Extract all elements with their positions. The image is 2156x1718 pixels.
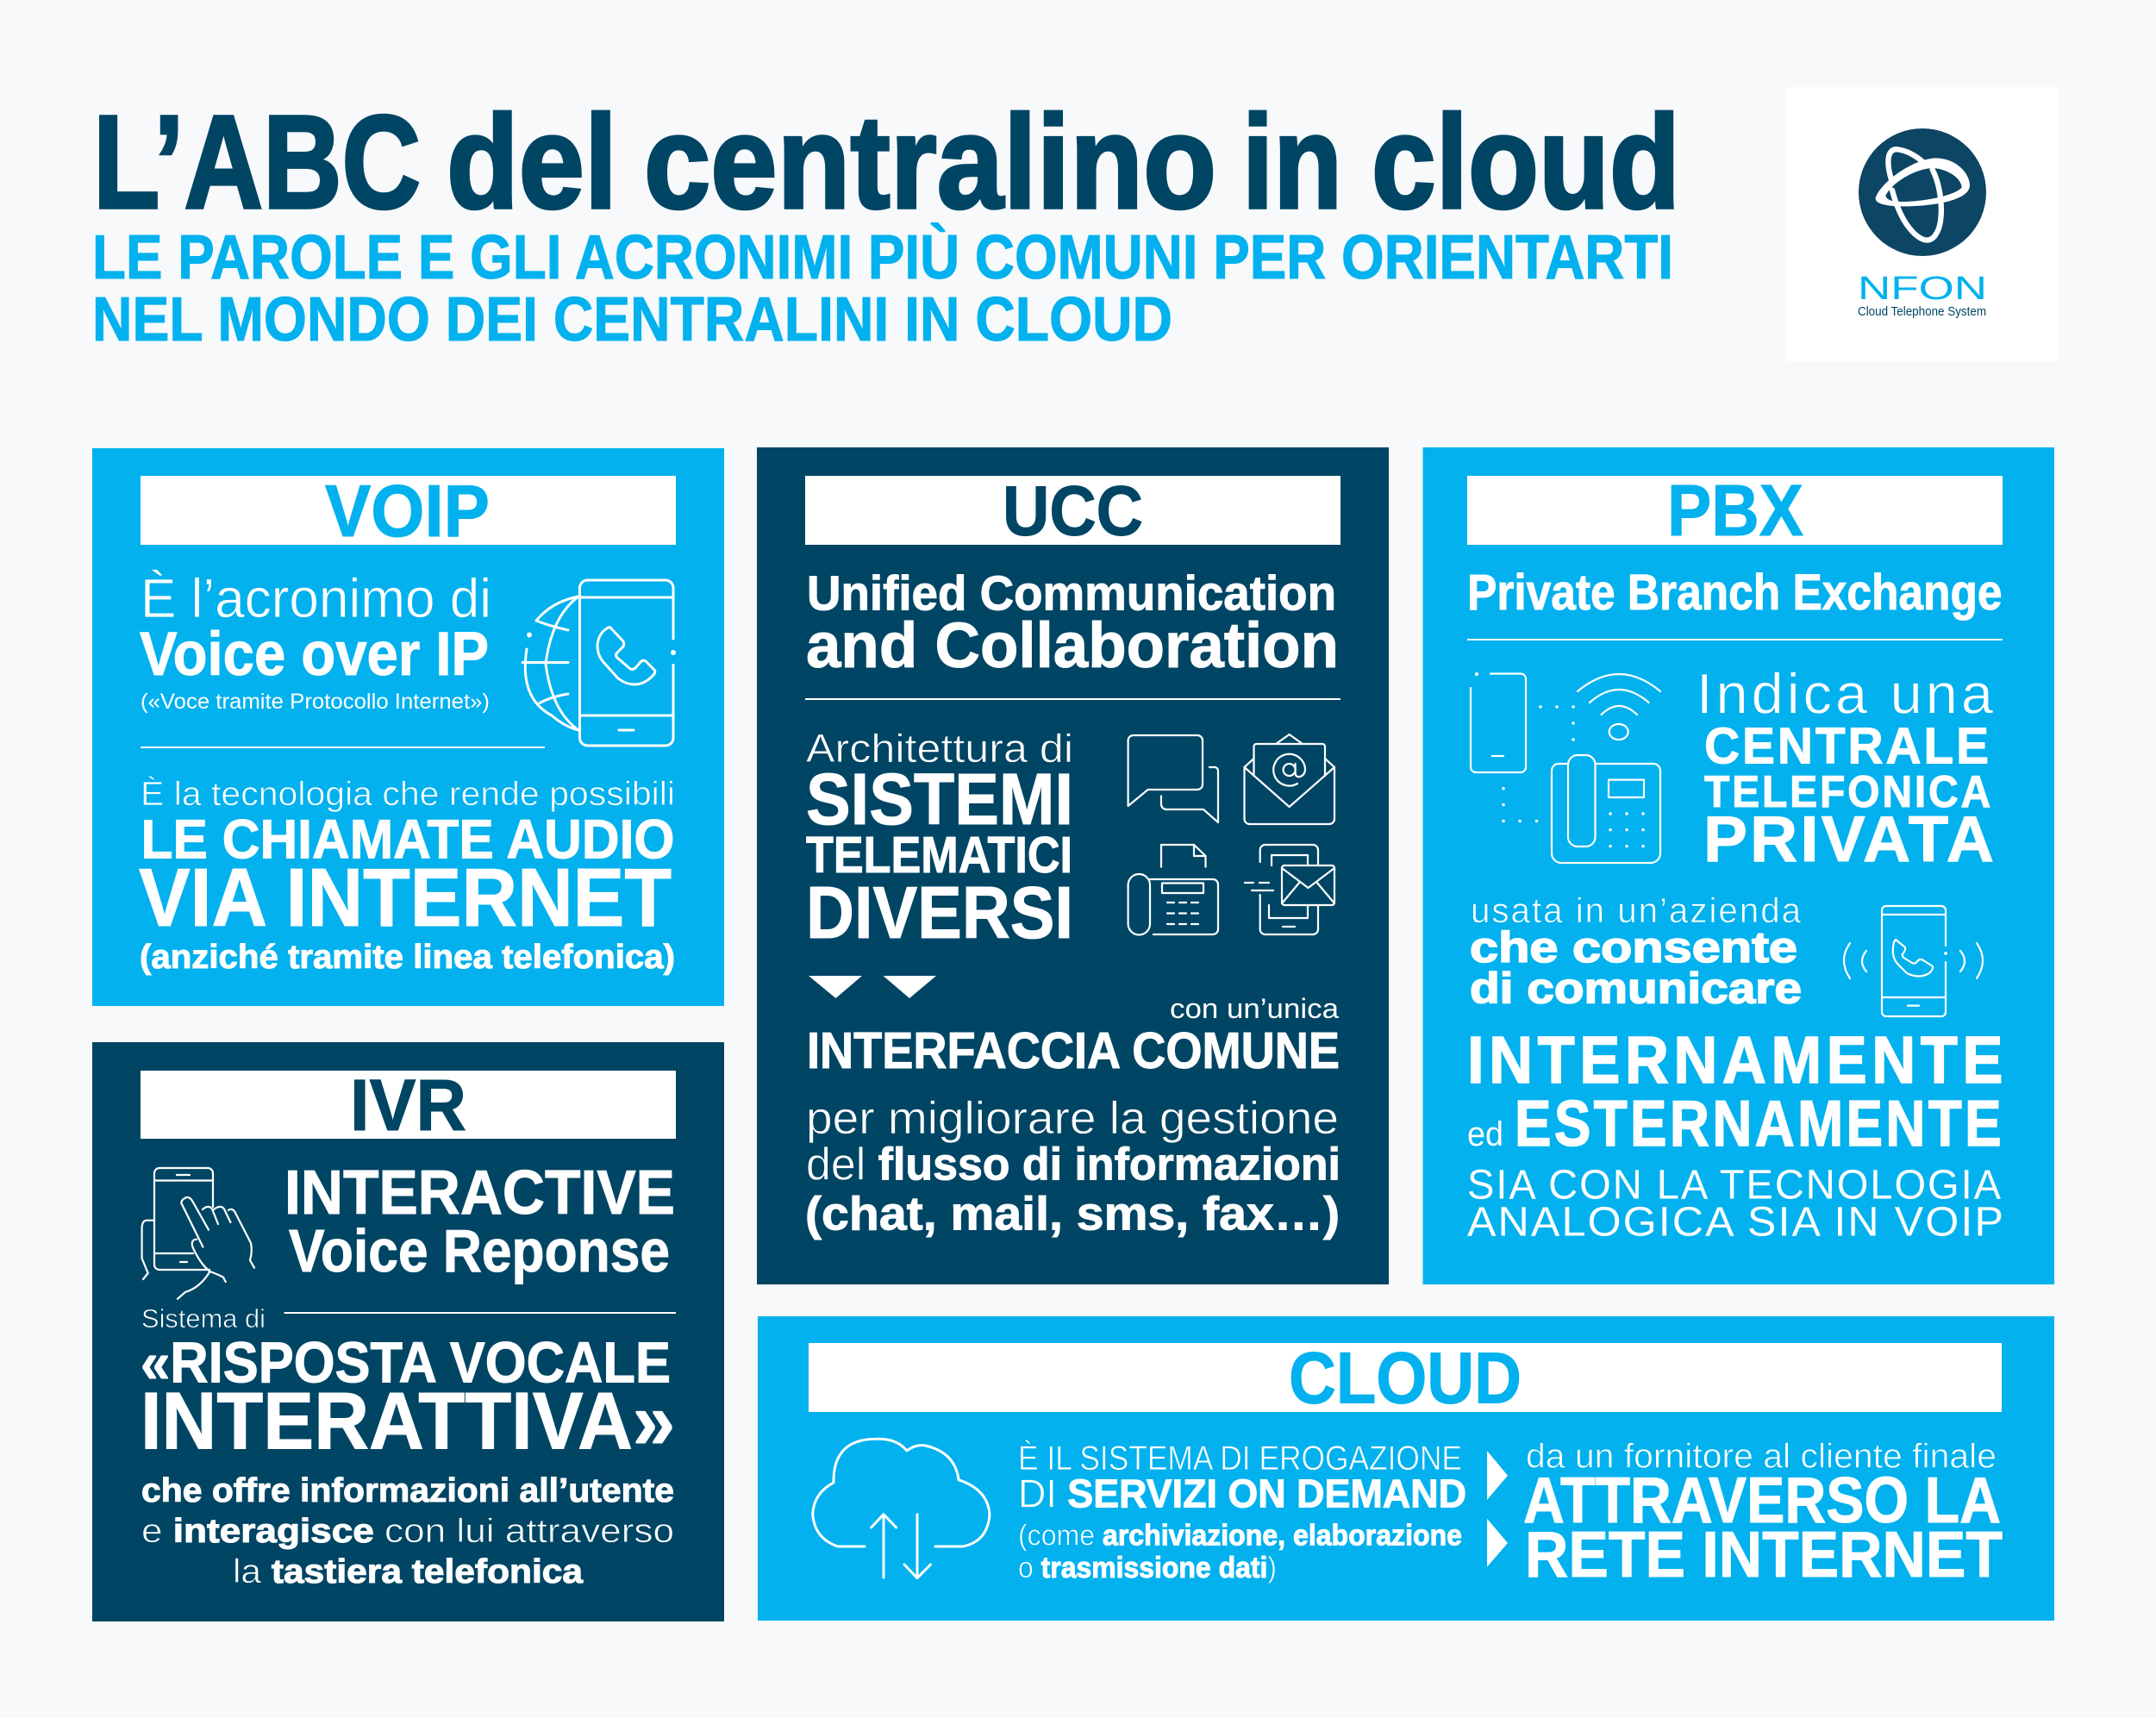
logo: NFON	[1785, 87, 2059, 361]
heading: PBX: PBX	[1667, 470, 1803, 551]
text: attraverso la rete internet	[1523, 1438, 2003, 1590]
text: flusso di informazioni: del flusso di informazioni	[806, 1140, 1340, 1190]
title: L’ABC	[93, 88, 421, 236]
title	[93, 88, 1680, 236]
subtitle	[92, 222, 1673, 354]
icon: hand touching smartphone	[142, 1168, 254, 1299]
text: acronym definition: («Voce tramite Protocollo Internet»)	[141, 690, 490, 714]
text: risposta vocale interattiva: «RISPOSTA VOCALE	[141, 1331, 671, 1395]
text: sistema di erogazione: DI SERVIZI ON DEMAND	[1018, 1471, 1466, 1515]
logo: NFON: Cloud Telephone System	[1858, 304, 1986, 319]
icon: cloud upload download	[813, 1439, 990, 1578]
text: technology description: VIA INTERNET	[139, 852, 672, 944]
text: sistema di erogazione	[1018, 1439, 1466, 1584]
title: del	[447, 88, 617, 236]
text: description: la tastiera telefonica	[233, 1553, 583, 1590]
text: usata in un'azienda: di comunicare	[1470, 964, 1802, 1012]
text: centrale telefonica privata: PRIVATA	[1703, 803, 1997, 875]
title: centralino	[644, 88, 1216, 236]
icon: phones and wifi	[1471, 673, 1660, 863]
panel: CLOUD	[758, 1316, 2054, 1621]
text: centrale telefonica privata: CENTRALE	[1704, 717, 1991, 774]
text: description: che offre informazioni all’utente	[141, 1472, 674, 1509]
text: risposta vocale interattiva: Sistema di	[141, 1303, 266, 1334]
text: technology description: È la tecnologia che rende possibili	[141, 776, 675, 813]
arrows: two right triangles	[1487, 1451, 1508, 1567]
text: centrale telefonica privata	[1697, 662, 1997, 875]
text: sistemi telematici diversi: Architettura di	[806, 726, 1073, 771]
text: interfaccia comune: INTERFACCIA COMUNE	[807, 1022, 1340, 1079]
text: sistema di erogazione: È IL SISTEMA DI EROGAZIONE	[1018, 1439, 1462, 1477]
text: risposta vocale interattiva	[141, 1303, 675, 1465]
heading: UCC	[805, 472, 1340, 550]
text: technology description: LE CHIAMATE AUDIO	[141, 809, 674, 871]
heading: VOIP	[141, 471, 676, 553]
text: Private Branch Exchange: Private Branch Exchange	[1467, 565, 2002, 621]
icon: smartphone and globe	[522, 580, 674, 746]
text: sistema di erogazione: o trasmissione dati)	[1018, 1552, 1277, 1584]
panel: VOIP	[92, 448, 724, 1006]
text: internamente ed esternamente	[1467, 1023, 2008, 1159]
text: internamente ed esternamente: ed	[1467, 1115, 1503, 1153]
panel: PBX	[1422, 447, 2054, 1284]
logo: NFON: NFON	[1858, 271, 1987, 307]
heading: UCC: UCC	[1003, 472, 1143, 550]
text: Unified Communication and Collaboration: and Collaboration	[806, 609, 1339, 681]
text: technology description: (anziché tramite linea telefonica)	[140, 939, 675, 976]
panel: UCC	[757, 447, 1389, 1284]
icon: chat bubbles	[1128, 735, 1218, 822]
text: centrale telefonica privata: Indica una	[1697, 662, 1997, 726]
text: sistema di erogazione: (come archiviazione, elaborazione	[1018, 1519, 1462, 1552]
text: acronym definition: Voice over IP	[140, 621, 489, 689]
arrows: two down triangles	[809, 976, 936, 998]
text: description: e interagisce con lui attraverso	[141, 1513, 674, 1550]
text: Interactive Voice Reponse	[284, 1159, 675, 1284]
text: usata in un'azienda: usata in un’azienda	[1471, 890, 1803, 930]
icon: fax	[1128, 845, 1218, 934]
text: attraverso la rete internet: RETE INTERNET	[1525, 1518, 2003, 1590]
text: flusso di informazioni: per migliorare la gestione	[806, 1093, 1339, 1144]
icon: message sending	[1245, 845, 1334, 934]
text: interfaccia comune: con un’unica	[1170, 993, 1339, 1024]
text: acronym definition: È l’acronimo di	[141, 567, 491, 629]
text: Unified Communication and Collaboration	[806, 565, 1339, 681]
icon: email envelope	[1245, 734, 1334, 824]
text: Unified Communication and Collaboration: Unified Communication	[807, 565, 1336, 621]
heading: IVR: IVR	[350, 1065, 466, 1146]
text: sistemi telematici diversi: SISTEMI	[806, 759, 1073, 840]
text: description	[141, 1472, 674, 1590]
text: usata in un'azienda: che consente	[1470, 923, 1797, 971]
text: sistemi telematici diversi	[806, 726, 1073, 954]
text: usata in un'azienda	[1470, 890, 1803, 1012]
text: internamente ed esternamente: ESTERNAMENTE	[1515, 1087, 2004, 1159]
text: risposta vocale interattiva: INTERATTIVA»	[141, 1376, 675, 1465]
text: attraverso la rete internet: ATTRAVERSO LA	[1523, 1464, 2001, 1536]
text: Interactive Voice Reponse: Voice Reponse	[289, 1217, 670, 1284]
subtitle: NEL MONDO DEI CENTRALINI IN CLOUD	[92, 285, 1172, 354]
text: tecnologia analogica e voip: SIA CON LA TECNOLOGIA	[1467, 1162, 2003, 1209]
text: tecnologia analogica e voip: ANALOGICA SIA IN VOIP	[1467, 1200, 2005, 1245]
text: interfaccia comune	[807, 993, 1340, 1079]
text: flusso di informazioni: (chat, mail, sms, fax…)	[805, 1186, 1340, 1240]
text: sistemi telematici diversi: TELEMATICI	[806, 827, 1072, 884]
text: acronym definition	[140, 567, 491, 714]
title: cloud	[1372, 88, 1680, 236]
text: centrale telefonica privata: TELEFONICA	[1704, 767, 1993, 817]
text: attraverso la rete internet: da un fornitore al cliente finale	[1526, 1438, 1997, 1476]
panel: IVR	[92, 1042, 724, 1621]
text: Interactive Voice Reponse: INTERACTIVE	[284, 1159, 675, 1228]
text: sistemi telematici diversi: DIVERSI	[806, 872, 1073, 954]
heading: IVR	[141, 1065, 676, 1146]
heading: PBX	[1467, 470, 2003, 551]
title: in	[1242, 88, 1342, 236]
heading: CLOUD	[809, 1338, 2002, 1419]
text: flusso di informazioni	[805, 1093, 1340, 1240]
heading: CLOUD: CLOUD	[1289, 1338, 1522, 1419]
text: technology description	[139, 776, 675, 976]
heading: VOIP: VOIP	[325, 471, 490, 553]
text: tecnologia analogica e voip	[1467, 1162, 2005, 1245]
text: internamente ed esternamente: INTERNAMENTE	[1467, 1023, 2008, 1097]
icon: ringing smartphone	[1844, 906, 1983, 1016]
subtitle: LE PAROLE E GLI ACRONIMI PIÙ COMUNI PER ORIENTARTI	[92, 222, 1673, 292]
